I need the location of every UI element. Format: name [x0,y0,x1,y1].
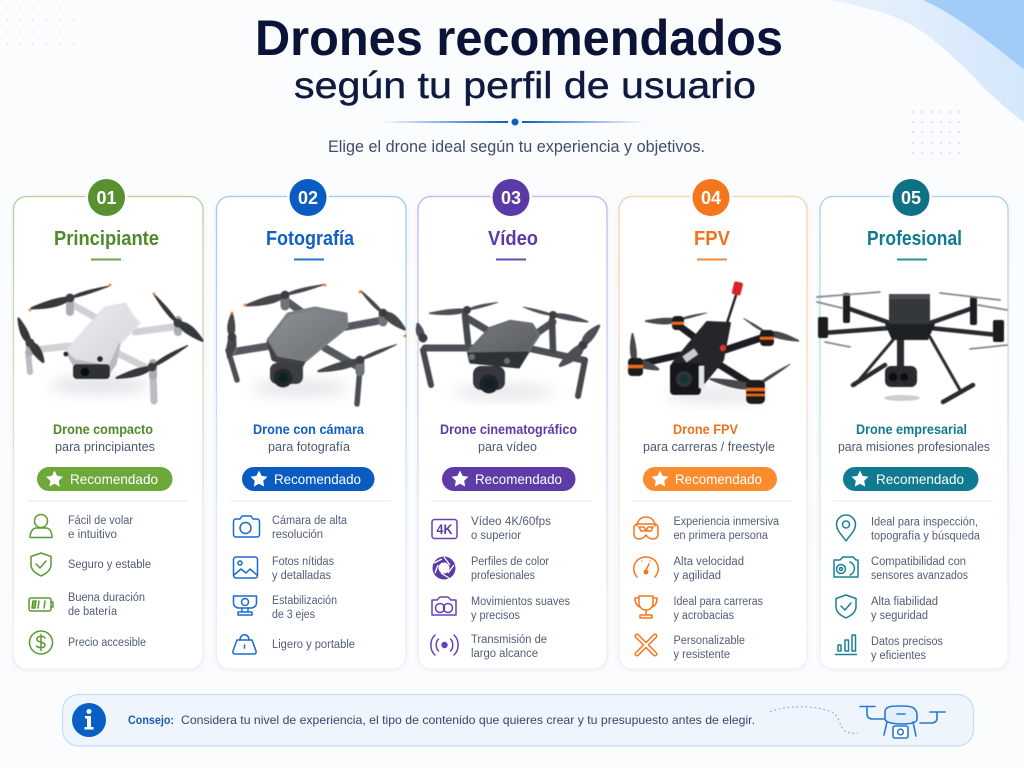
feature: racing: y acrobacias [674,610,734,622]
icon: info [72,703,106,737]
number badge 04: 04 [701,188,721,208]
feature: colour: profesionales [471,570,535,582]
feature: smooth: Movimientos suaves [471,596,570,608]
panel: FPV [619,176,807,669]
feature: reliability: Alta fiabilidad [871,596,938,608]
number badge 02 [290,179,326,216]
recommended badge: Recomendado [274,471,361,487]
feature: reliability [871,596,938,622]
recommended badge [442,467,576,491]
intro text: Elige el drone ideal según tu experiencia y objetivos. [328,138,705,156]
heading: FPV [694,228,731,250]
icon: gauge [634,557,658,577]
feature: stabilisation: de 3 ejes [272,609,315,621]
icon: person [30,514,52,538]
recommended badge [242,467,374,491]
icon: shield [31,553,51,576]
icon: trophy [635,596,657,618]
icon: bar chart [836,635,856,654]
icon: 4K: 4K [436,522,453,537]
drone name: Drone cinematográfico [440,422,577,437]
drone photo: grey camera [224,282,409,404]
icon: gimbal [234,596,256,615]
feature: easy [68,515,133,541]
number badge 04 [692,179,730,216]
icon: tools [637,636,655,654]
drone photo: FPV [628,281,800,404]
drone use: para carreras / freestyle [643,439,775,454]
heading: Principiante [54,228,159,250]
icon: signal [431,635,458,655]
feature: inspection: Ideal para inspección, [871,516,978,528]
icon: bag [233,635,256,654]
feature: reliability: y seguridad [871,610,928,622]
number badge 05 [892,179,930,216]
title: Drones recomendados [255,10,783,66]
panel: Profesional [817,176,1008,669]
feature: immersive: Experiencia inmersiva [674,516,780,528]
recommended badge: Recomendado [475,471,562,487]
number badge 05: 05 [901,188,921,208]
feature: stabilisation [272,595,337,621]
number badge 01: 01 [96,188,117,208]
title divider [380,118,646,126]
feature: data: Datos precisos [871,636,943,648]
icon: small drone [860,706,945,738]
feature: sensors: sensores avanzados [871,570,968,582]
feature: colour: Perfiles de color [471,556,549,568]
drone photo: cinematic [413,300,603,400]
feature: customisable [674,635,745,661]
drone use: para misiones profesionales [838,439,990,454]
feature: stabilisation: Estabilización [272,595,337,607]
number badge 03: 03 [501,188,521,208]
icon: battery [29,598,53,611]
recommended badge: Recomendado [70,471,158,487]
feature: colour [471,556,549,582]
feature: transmission: Transmisión de [471,634,547,646]
feature: data [871,636,943,662]
feature: inspection [871,516,981,542]
icon: location pin [836,515,856,541]
feature: transmission: largo alcance [471,648,538,660]
dashed flight path [770,707,858,733]
heading: Vídeo [488,228,538,250]
feature: portable: Ligero y portable [272,639,355,651]
feature: speed: y agilidad [674,570,721,582]
recommended badge: Recomendado [675,471,762,487]
feature: resolution: Cámara de alta [272,515,348,527]
tip text: Considera tu nivel de experiencia, el tipo de contenido que quieres crear y tu presupuesto antes de elegir. [181,713,755,727]
feature: smooth [471,596,570,622]
feature: speed [674,556,744,582]
icon: image [234,557,258,578]
feature: 4K video: o superior [471,530,521,542]
feature: resolution: resolución [272,529,323,541]
feature: photos [272,556,334,582]
feature: immersive [674,516,780,542]
recommended badge [37,467,172,491]
drone use: para vídeo [478,439,537,454]
recommended badge: Recomendado [876,471,964,487]
feature: sensors: Compatibilidad con [871,556,966,568]
feature: price: Precio accesible [68,637,146,649]
number badge 01 [88,179,125,216]
drone name: Drone con cámara [253,422,364,437]
recommended badge [643,467,777,491]
heading: Fotografía [266,228,355,250]
feature: battery: de batería [68,606,118,618]
drone use: para principiantes [55,439,155,454]
tip label: Consejo: [128,713,174,727]
feature: sensors [871,556,968,582]
feature: easy: Fácil de volar [68,515,133,527]
feature: 4K video: Vídeo 4K/60fps [471,516,551,528]
icon: camera [432,597,456,615]
feature: immersive: en primera persona [674,530,769,542]
icon: aperture [434,557,454,578]
feature: photos: Fotos nítidas [272,556,334,568]
feature: racing [674,596,763,622]
feature: battery [68,592,145,618]
icon: camera [234,516,260,537]
panel: Vídeo [413,176,607,669]
drone photo: compact white [14,284,206,401]
drone use: para fotografía [268,439,351,454]
drone name: Drone FPV [673,422,738,437]
callout: tip [62,694,974,746]
feature: speed: Alta velocidad [674,556,744,568]
feature: photos: y detalladas [272,570,331,582]
icon: goggles [634,517,658,539]
feature: data: y eficientes [871,650,926,662]
panel: Principiante [14,176,206,669]
feature: easy: e intuitivo [68,529,117,541]
icon: price [30,631,52,654]
icon: shield [836,595,856,618]
feature: 4K video [471,516,551,542]
drone photo: enterprise [817,292,1007,402]
feature: inspection: topografía y búsqueda [871,530,981,542]
feature: customisable: y resistente [674,649,730,661]
icon: 4K [432,520,457,538]
number badge 02: 02 [298,188,318,208]
feature: smooth: y precisos [471,610,520,622]
feature: racing: Ideal para carreras [674,596,763,608]
drone name: Drone empresarial [856,422,967,437]
icon: sensor camera [834,557,858,577]
feature: safe: Seguro y estable [68,559,151,571]
subtitle line: según tu perfil de usuario [294,65,756,106]
recommended badge [843,467,978,491]
panel: Fotografía [216,176,409,669]
heading: Profesional [867,228,962,250]
drone name: Drone compacto [53,422,153,437]
number badge 03 [492,179,530,216]
feature: resolution [272,515,348,541]
feature: battery: Buena duración [68,592,145,604]
feature: transmission [471,634,547,660]
feature: customisable: Personalizable [674,635,745,647]
